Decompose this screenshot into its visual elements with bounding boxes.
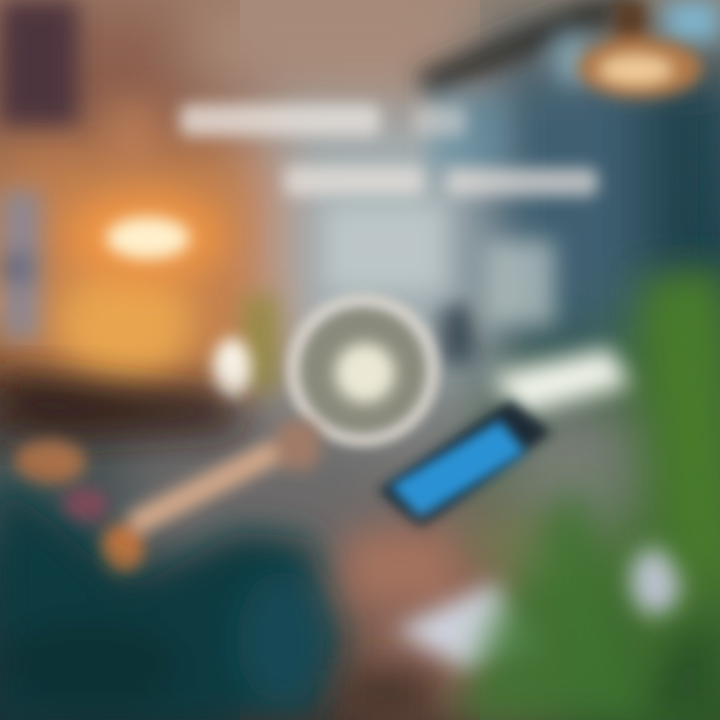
icon: glowing lamp left bbox=[57, 100, 225, 383]
icon: smart home circular dial bbox=[293, 300, 433, 440]
icon: papers on table bbox=[395, 548, 681, 672]
background: table edge dark band bbox=[0, 375, 240, 435]
background: pale curtains and shelves centre bbox=[243, 205, 555, 390]
icon: smartphone with blue screen bbox=[378, 400, 552, 530]
background: wooden table bottom bbox=[345, 535, 455, 720]
icon: arm and hand bbox=[14, 420, 320, 576]
icon: bright device right of dial bbox=[490, 348, 632, 415]
heading: blurred title text bbox=[180, 104, 598, 196]
panel: green plant leaves foreground bbox=[450, 270, 720, 720]
ceiling beam top right bbox=[415, 0, 720, 170]
icon: hanging lamp top right bbox=[578, 0, 702, 98]
dark window frame top left bbox=[0, 0, 78, 340]
panel: dark teal sweater foreground bbox=[0, 480, 345, 720]
icon: small glowing panel bbox=[213, 338, 251, 398]
